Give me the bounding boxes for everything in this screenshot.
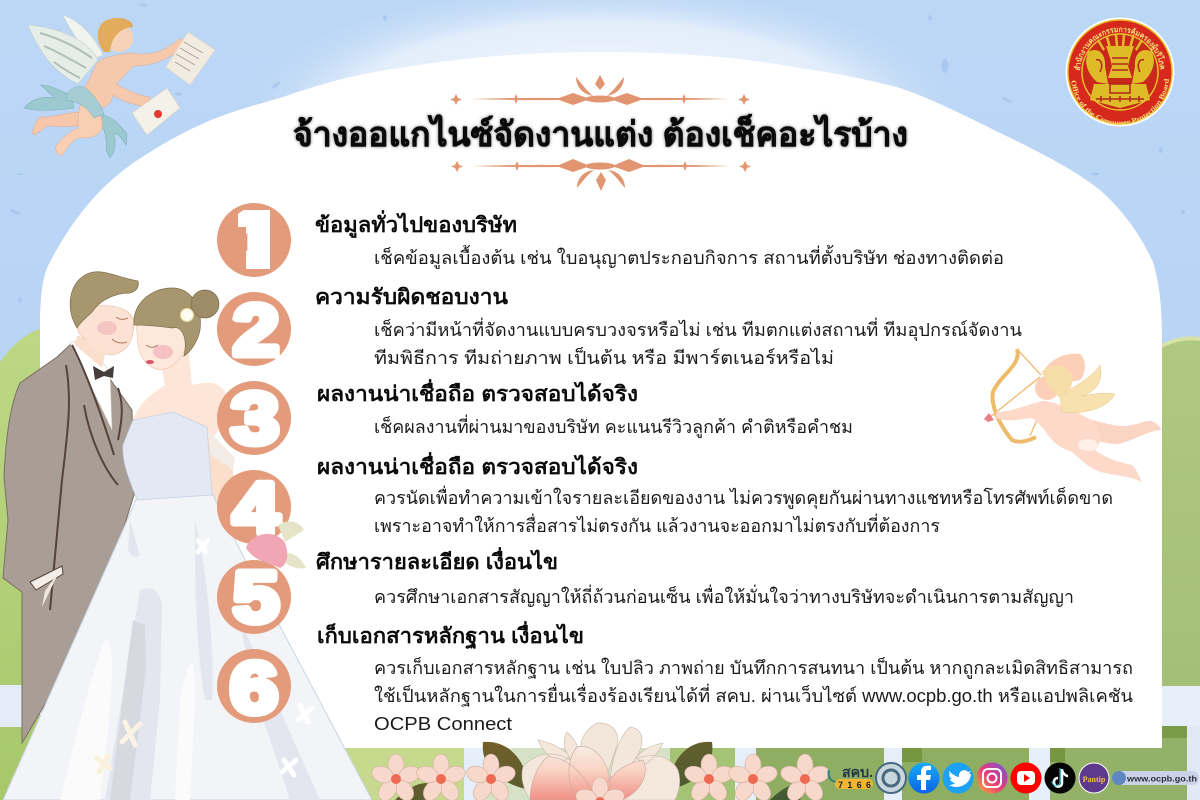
seal emblem [1086, 46, 1154, 108]
bouquet flowers [246, 534, 287, 568]
bride hair flower [180, 308, 194, 322]
bride hair [134, 288, 200, 356]
decoration: title ornament bottom [451, 159, 751, 191]
icon: youtube [1010, 762, 1042, 794]
illustration: cupid with bow [984, 349, 1161, 482]
groom neck [74, 335, 105, 368]
item 2 body: ทีมพิธีการ ทีมถ่ายภาพ เป็นต้น หรือ มีพาร์ตเนอร์หรือไม่ [374, 346, 834, 368]
groom hair [70, 272, 138, 328]
magnolia top petals [564, 723, 642, 780]
seal emblem detail [1096, 58, 1144, 102]
bride back arm [205, 425, 234, 510]
illustration: cherub carrying letter [24, 15, 215, 158]
item 6 body: ควรเก็บเอกสารหลักฐาน เช่น ใบปลิว ภาพถ่าย บันทึกการสนทนา เป็นต้น หากถูกละเมิดสิทธิสามารถ [374, 656, 1133, 679]
number badge 1 [217, 203, 291, 277]
dress folds [105, 520, 320, 800]
illustration: bride and groom [3, 272, 372, 800]
item 2 [315, 286, 1022, 368]
blossoms [370, 754, 422, 800]
logo: OCPB seal [1066, 18, 1174, 126]
dress fold shadows [110, 620, 146, 800]
seal inner disc [1082, 34, 1158, 110]
background: pale cloud behind panel [240, 0, 960, 235]
cherub wing back [63, 15, 103, 60]
envelope heart [154, 110, 162, 118]
groom hand shadow [42, 570, 60, 607]
bride bodice [123, 412, 212, 500]
seal outer ring [1066, 18, 1174, 126]
cupid bow [993, 349, 1036, 442]
item 3 [317, 378, 853, 438]
background: checked ground strips [0, 685, 1200, 800]
item 2 body: เช็คว่ามีหน้าที่จัดงานแบบครบวงจรหรือไม่ เช่น ทีมตกแต่งสถานที่ ทีมอุปกรณ์จัดงาน [374, 317, 1022, 341]
icon: pantip [1079, 763, 1109, 793]
bride face [136, 309, 190, 370]
envelope [132, 88, 180, 135]
groom jacket [3, 343, 134, 743]
bride eye [146, 345, 158, 347]
number badge 3 [217, 378, 291, 458]
icon: twitter [942, 762, 974, 794]
cupid hair [1042, 366, 1072, 398]
seal red disc [1068, 20, 1172, 124]
bride hair bun [191, 290, 219, 318]
footer: consumer icon [876, 763, 906, 793]
icon: instagram [976, 762, 1008, 794]
bride lips [146, 360, 154, 364]
icon: tiktok [1044, 762, 1076, 794]
footer: OCPB hotline logo [829, 764, 873, 790]
cupid arrow and string [990, 349, 1041, 436]
cupid far leg [1080, 418, 1161, 444]
cherub hair [98, 18, 133, 52]
cherub near leg [56, 104, 102, 155]
cherub waist cloth [66, 86, 104, 118]
groom blush [97, 321, 117, 335]
bride blush [153, 345, 173, 359]
decoration: title ornament top [450, 75, 750, 105]
cupid body and near leg [996, 401, 1142, 482]
cherub ribbon tails [24, 85, 127, 158]
number badge 2 [217, 291, 291, 371]
number badge 3: 3 [231, 378, 279, 458]
groom face [78, 306, 134, 355]
bride skirt [3, 493, 372, 800]
seal emblem rays [1098, 35, 1142, 50]
cupid arrow tip [984, 413, 994, 422]
bride neck and shoulders [130, 345, 226, 440]
background: sky speckles [9, 4, 1185, 303]
footer: website pill [1112, 771, 1199, 785]
magnolia back petals [522, 740, 680, 800]
item 6 body: ใช้เป็นหลักฐานในการยื่นเรื่องร้องเรียนได้ที่ สคบ. ผ่านเว็บไซต์ www.ocpb.go.th หรือแอปพลิเคชัน [374, 683, 1133, 707]
number badge 5 [217, 558, 291, 638]
item 6 body: OCPB Connect [374, 714, 512, 734]
cupid wings [1060, 365, 1115, 413]
item 1 heading: ข้อมูลทั่วไปของบริษัท [315, 209, 517, 239]
bride bouquet [246, 521, 306, 568]
item 1 [315, 209, 1004, 269]
letter page [166, 32, 215, 85]
number badge 5: 5 [233, 558, 279, 638]
cherub wing front [28, 25, 98, 84]
item 4 body: ควรนัดเพื่อทำความเข้าใจรายละเอียดของงาน ไม่ควรพูดคุยกันผ่านทางแชทหรือโทรศัพท์เด็ดขาด [374, 485, 1113, 509]
item 5 heading: ศึกษารายละเอียด เงื่อนไข [316, 546, 558, 574]
item 6 body [374, 656, 1133, 734]
hotline number: 7166 [838, 780, 871, 790]
item 3 body: เช็คผลงานที่ผ่านมาของบริษัท คะแนนรีวิวลูกค้า คำติหรือคำชม [374, 414, 853, 438]
icon: facebook [908, 762, 940, 794]
cupid face [1035, 376, 1059, 400]
garland leaves [395, 742, 808, 800]
background: right green hill body [1160, 340, 1200, 800]
cupid hood [1043, 354, 1085, 384]
item 4 body [374, 485, 1113, 536]
bouquet leaves [278, 521, 306, 568]
item 5 [316, 546, 1074, 607]
item 2 body [374, 317, 1022, 368]
title: จ้างออแกไนซ์จัดงานแต่ง ต้องเช็คอะไรบ้าง [293, 113, 908, 154]
magnolia centre petals [530, 746, 645, 800]
item 4 [317, 451, 1113, 536]
dress appliques [97, 540, 312, 775]
item 4 heading: ผลงานน่าเชื่อถือ ตรวจสอบได้จริง [317, 451, 638, 479]
groom shirt [70, 338, 112, 430]
background: left green hill [0, 328, 42, 800]
groom cuff [30, 566, 63, 590]
icon: pantip: Pantip [1083, 775, 1106, 784]
footer: website pill: www.ocpb.go.th [1126, 774, 1197, 784]
background: right hill rim [1160, 336, 1200, 800]
number badge 4: 4 [233, 469, 279, 549]
seal english ring text: Office of the Consumer Protection Board [1072, 79, 1169, 125]
flowers: bottom garland [370, 723, 831, 800]
cherub wing feathers [40, 33, 92, 78]
cupid body highlights [1078, 439, 1098, 451]
letter lines [175, 42, 203, 71]
number badge 6 [217, 648, 291, 728]
cherub head [105, 24, 133, 52]
item 6 [317, 620, 1133, 734]
dress highlights [60, 640, 195, 800]
hotline label: สคบ. [842, 764, 873, 780]
seal thai ring text: สำนักงานคณะกรรมการคุ้มครองผู้บริโภค [1074, 28, 1166, 70]
number badge 4 [217, 469, 291, 549]
cherub torso and arms [84, 38, 184, 108]
groom bow tie [93, 366, 114, 380]
bride sleeve [208, 430, 235, 470]
item 6 heading: เก็บเอกสารหลักฐาน เงื่อนไข [317, 620, 584, 650]
number badge 1: 1 [236, 194, 280, 283]
groom lapel lines [50, 345, 122, 610]
item 4 body: เพราะอาจทำให้การสื่อสารไม่ตรงกัน แล้วงานจะออกมาไม่ตรงกับที่ต้องการ [374, 513, 940, 536]
item 2 heading: ความรับผิดชอบงาน [315, 286, 509, 309]
number badge 6: 6 [230, 648, 278, 728]
cherub far leg [33, 112, 84, 135]
groom eye and smile [112, 317, 128, 343]
item 5 body: ควรศึกษาเอกสารสัญญาให้ถี่ถ้วนก่อนเซ็น เพื่อให้มั่นใจว่าทางบริษัทจะดำเนินการตามสัญญา [374, 584, 1074, 607]
item 3 heading: ผลงานน่าเชื่อถือ ตรวจสอบได้จริง [317, 378, 638, 406]
item 1 body: เช็คข้อมูลเบื้องต้น เช่น ใบอนุญาตประกอบกิจการ สถานที่ตั้งบริษัท ช่องทางติดต่อ [374, 245, 1004, 269]
number badge 2: 2 [233, 291, 279, 371]
hotline phone icon [829, 770, 840, 782]
